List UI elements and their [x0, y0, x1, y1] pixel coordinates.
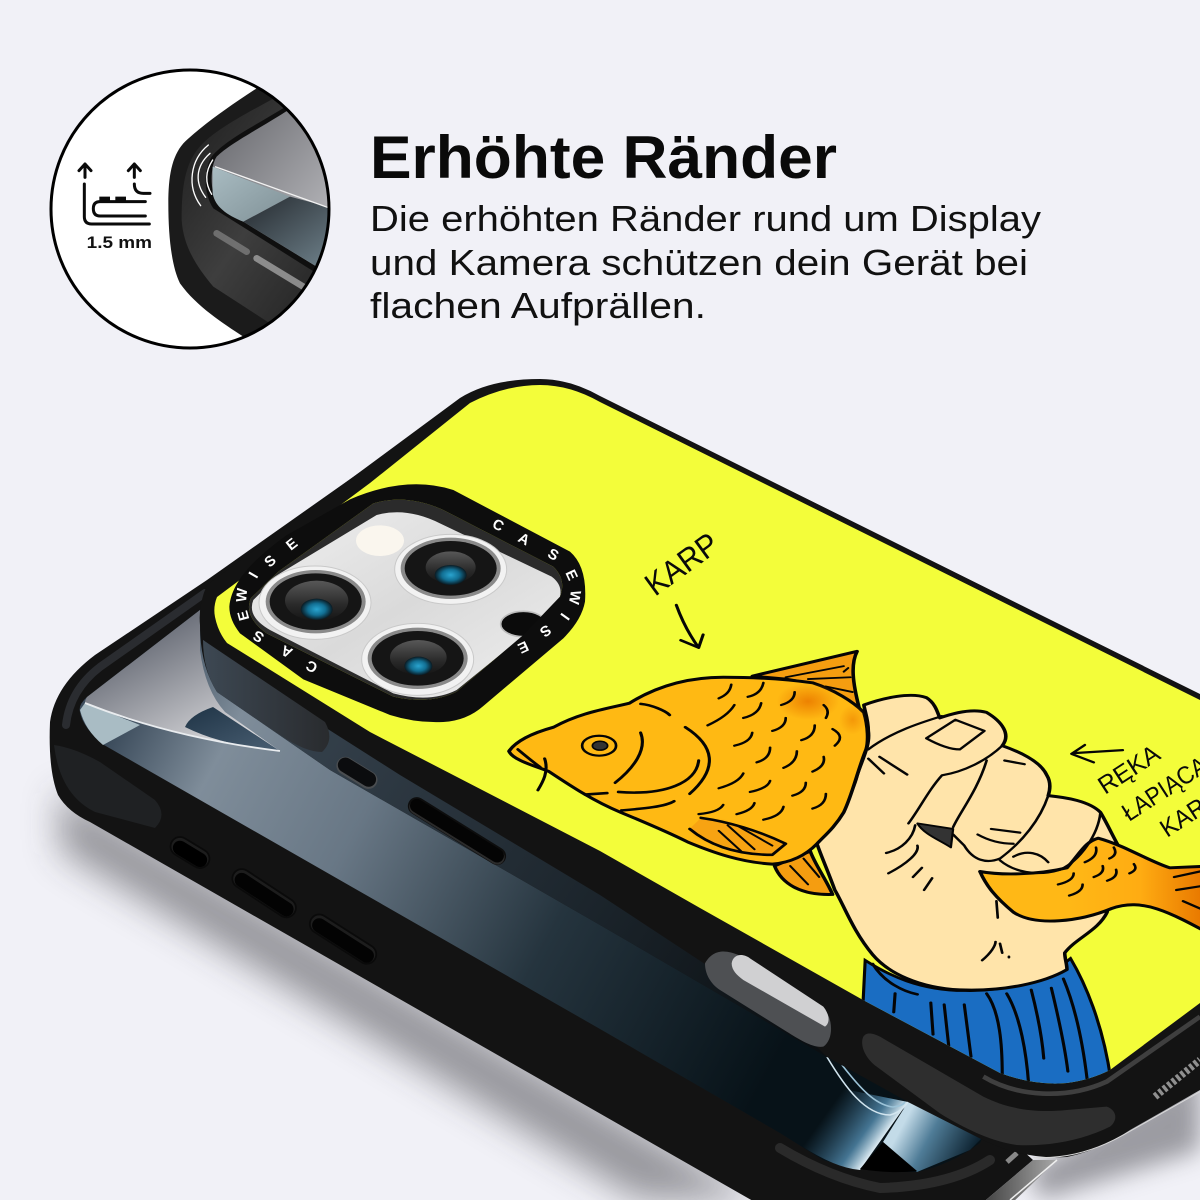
dorsal fin	[752, 651, 859, 709]
camera bevel	[249, 500, 562, 700]
front phone body	[200, 379, 1200, 1157]
lens top right	[395, 534, 507, 604]
brand text on ring: S	[536, 621, 554, 640]
front phone yellow back	[214, 385, 1200, 1084]
fish scales	[699, 683, 840, 820]
fish face	[518, 704, 709, 810]
illustration: carp held in a fist	[509, 605, 1200, 990]
brand text on ring: C	[489, 516, 507, 536]
camera module	[229, 484, 585, 722]
front phone underside band	[203, 640, 827, 1057]
hand lettering: KARP: KARP	[638, 525, 725, 603]
carbon pad	[862, 1034, 1115, 1145]
brand text on ring: W	[234, 587, 251, 603]
arrow pointing to hand	[1071, 745, 1123, 762]
body text: und Kamera schützen dein Gerät bei	[370, 242, 1028, 283]
camera ring	[229, 484, 585, 722]
pectoral fin	[690, 818, 786, 855]
body text	[370, 198, 1041, 326]
body text: Die erhöhten Ränder rund um Display	[370, 198, 1041, 239]
rim highlight	[983, 1017, 1200, 1094]
rear phone body	[50, 470, 1033, 1200]
volume down	[319, 924, 367, 956]
brand text on ring: A	[515, 530, 532, 550]
shadow under front phone	[1030, 1070, 1200, 1200]
brand text on ring: S	[545, 546, 561, 565]
lens left	[259, 566, 371, 639]
brand text on ring: A	[278, 641, 295, 660]
brand text on ring: E	[561, 568, 580, 583]
brand text on ring	[234, 516, 583, 675]
rear phone bottom corner edge	[980, 1153, 1057, 1200]
fish eye	[582, 736, 616, 756]
brand text on ring: S	[250, 626, 267, 645]
speaker grille	[1155, 1060, 1200, 1097]
measurement label: 1.5 mm	[87, 233, 152, 252]
front phone carbon pad near camera	[203, 640, 329, 752]
port recess	[705, 951, 831, 1047]
detail circle: raised edge close-up	[51, 70, 340, 348]
front phone outer edge highlight	[1033, 1092, 1200, 1158]
rear phone carbon corner pad	[54, 745, 162, 828]
rear phone screen	[80, 500, 1000, 1172]
volume up	[242, 879, 286, 909]
fish tail through fist	[980, 838, 1200, 936]
hand lettering: hand caption	[1093, 739, 1200, 843]
lower fin	[775, 851, 833, 895]
lens bottom	[362, 623, 474, 695]
rear phone shadow	[60, 790, 760, 1200]
hand lettering: hand caption: RĘKA	[1093, 739, 1166, 800]
flash	[356, 525, 404, 556]
wallpaper light blades	[800, 1080, 908, 1170]
brand text on ring: E	[515, 637, 531, 656]
charging port and front phone lower pad	[705, 951, 1200, 1158]
phone corner close-up	[168, 88, 340, 337]
brand text on ring: C	[303, 656, 320, 675]
brand text on ring: I	[246, 570, 262, 581]
side button	[417, 806, 497, 857]
front phone side controls	[345, 765, 497, 857]
body text: flachen Aufprällen.	[370, 285, 706, 326]
fingers and knuckle lines	[868, 716, 1100, 960]
arrow pointing to carp	[676, 605, 703, 648]
hand	[817, 695, 1118, 990]
brand text on ring: S	[262, 552, 280, 571]
port insert	[732, 955, 829, 1027]
heading: Erhöhte Ränder	[370, 124, 837, 191]
fish body	[509, 677, 868, 864]
brand text on ring: I	[556, 610, 572, 622]
impact arcs	[192, 145, 213, 206]
lidar	[501, 611, 546, 637]
mute switch	[180, 846, 200, 860]
camera plateau	[252, 512, 561, 698]
brand text on ring: W	[565, 589, 583, 606]
icon: raised lip diagram	[79, 164, 150, 224]
rear phone side buttons	[180, 846, 367, 956]
microphone slot	[345, 765, 369, 780]
brand text on ring: E	[235, 608, 253, 622]
rear phone rim highlights	[66, 593, 990, 1188]
sweater cuff	[862, 956, 1111, 1084]
brand text on ring: E	[284, 535, 301, 554]
